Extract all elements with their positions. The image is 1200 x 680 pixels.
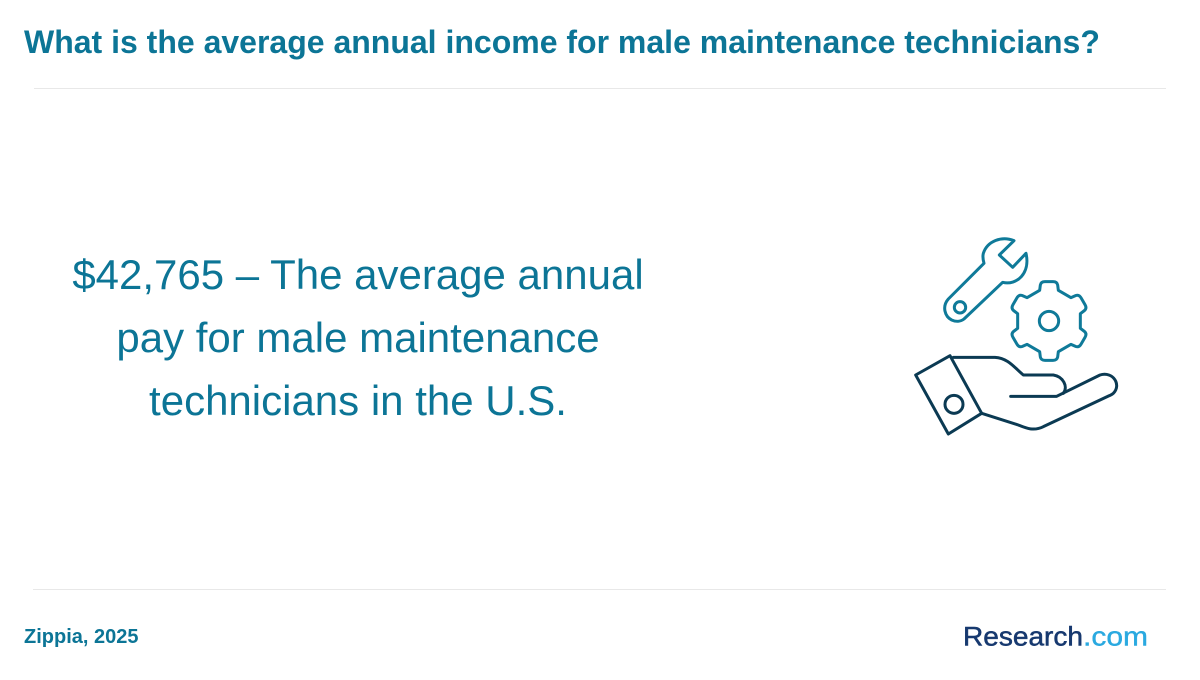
- source: Zippia, 2025: [24, 626, 138, 648]
- logo: Research.com: Research: [963, 622, 1083, 652]
- icon: hand holding wrench and gear: [914, 237, 1118, 436]
- logo: Research.com: [963, 622, 1148, 652]
- main statement: $42,765 – The average annual: [72, 251, 644, 298]
- main statement: [72, 251, 644, 424]
- icon: wrench: [945, 239, 1027, 321]
- title: What is the average annual income for male maintenance technicians?: [24, 24, 1100, 60]
- main statement: technicians in the U.S.: [149, 377, 567, 424]
- icon: gear: [1012, 282, 1086, 360]
- logo: Research.com: .com: [1083, 622, 1148, 652]
- icon: hand: [916, 356, 1117, 434]
- main statement: pay for male maintenance: [116, 314, 600, 361]
